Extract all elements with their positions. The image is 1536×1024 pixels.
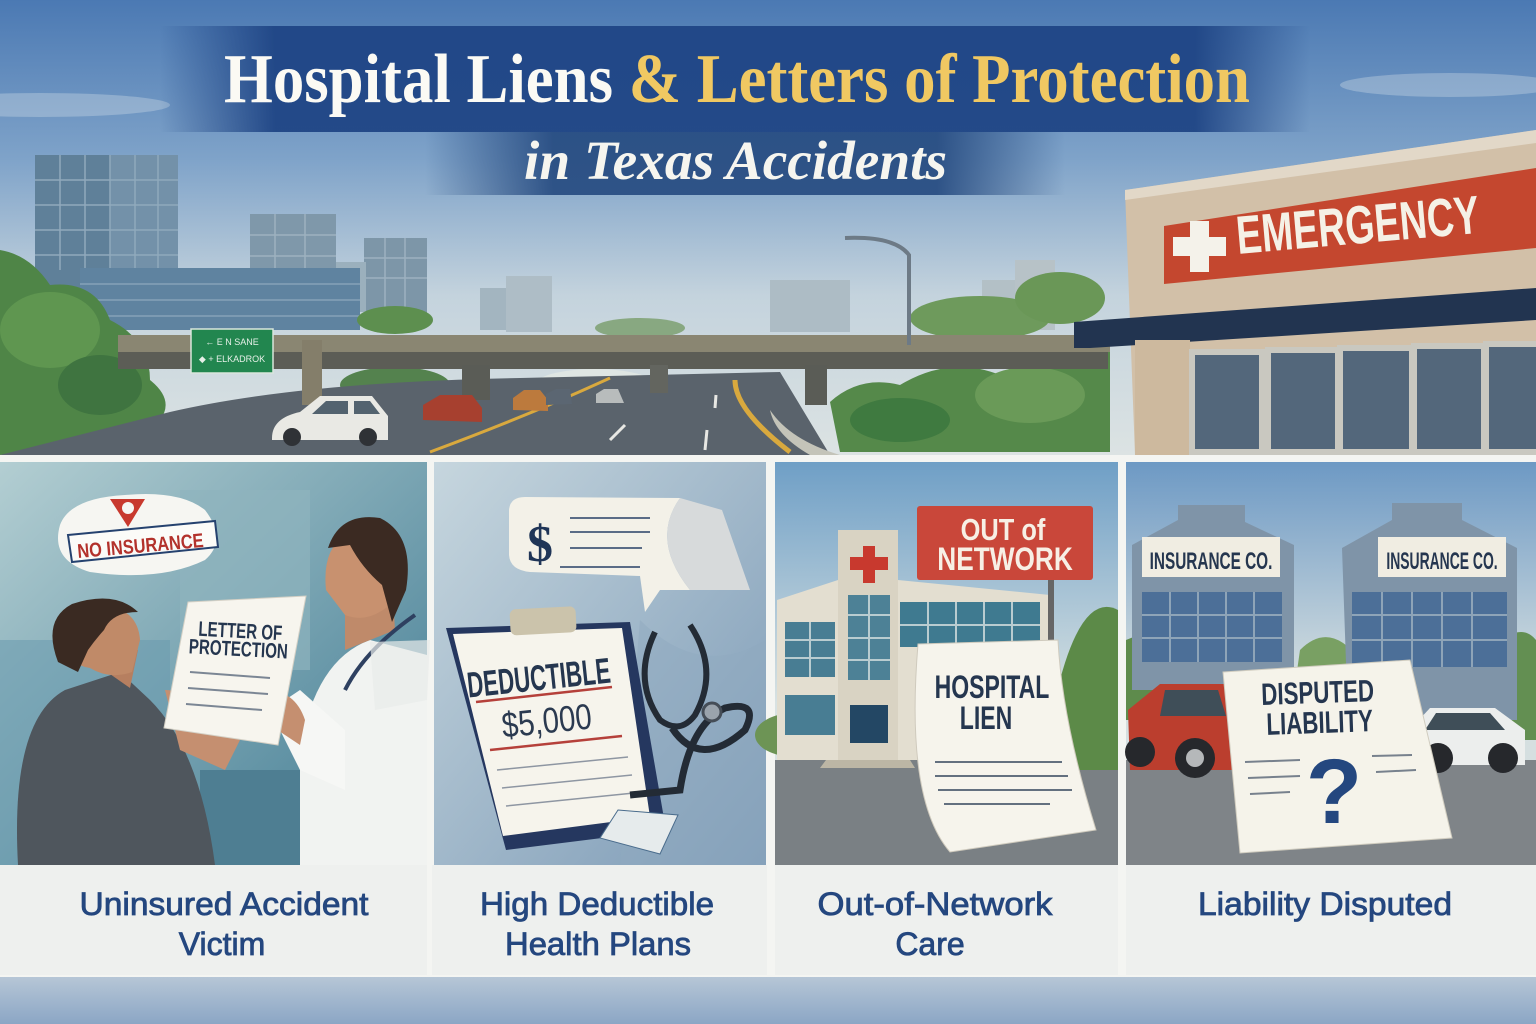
disputed liability document (1223, 660, 1452, 853)
panel: liability disputed (1125, 462, 1536, 865)
out of network sign (917, 506, 1093, 640)
heading: Hospital Liens & Letters of Protection (224, 41, 1250, 118)
hospital building (777, 530, 1050, 768)
hospital lien document (915, 640, 1096, 852)
stethoscope (630, 625, 750, 795)
doctor (265, 517, 430, 865)
caption: out-of-network care: Out-of-Network (818, 886, 1054, 922)
clipboard: DEDUCTIBLE (465, 651, 612, 706)
overpass (118, 335, 1110, 405)
panel: high deductible (434, 462, 766, 865)
panel: out of network (755, 462, 1118, 865)
no insurance badge (58, 494, 218, 575)
insurance building left: INSURANCE CO. (1150, 549, 1272, 575)
letter of protection document (164, 596, 306, 745)
bottom band (0, 977, 1536, 1024)
street lamp (845, 238, 909, 345)
speech bubble bill (509, 497, 750, 612)
highway sign (191, 329, 273, 373)
disputed liability document: LIABILITY (1266, 704, 1374, 742)
emergency sign (1164, 168, 1536, 284)
highway sign: ← E N SANE (205, 337, 259, 347)
hero scene: highway and hospital (0, 0, 1536, 455)
cars (272, 389, 624, 446)
caption strip (0, 865, 1536, 975)
hospital building (1074, 130, 1536, 455)
letter of protection document: LETTER OF (198, 616, 283, 645)
caption: high deductible health plans: High Deductible (480, 886, 714, 922)
clipboard: $5,000 (500, 696, 594, 745)
haze under overpass (535, 369, 655, 401)
disputed liability document: ? (1306, 741, 1362, 843)
out of network sign: NETWORK (937, 543, 1073, 578)
disputed liability document: DISPUTED (1261, 674, 1375, 712)
caption: liability disputed: Liability Disputed (1198, 886, 1452, 922)
red car (1125, 684, 1240, 778)
skyline: left buildings (35, 155, 1055, 332)
tag (600, 810, 678, 854)
caption: out-of-network care: Care (895, 926, 965, 962)
subheading: in Texas Accidents (524, 130, 947, 191)
letter of protection document: PROTECTION (188, 634, 288, 663)
hospital lien document: HOSPITAL (935, 669, 1049, 705)
trees (0, 250, 1110, 455)
out of network sign: OUT of (961, 513, 1046, 548)
insurance building left (1132, 505, 1294, 690)
title banner (160, 26, 1310, 195)
caption: uninsured accident victim: Victim (179, 926, 265, 962)
highway sign: ◆ + ELKADROK (199, 354, 265, 364)
white car (1405, 708, 1525, 773)
man in grey shirt (17, 599, 240, 865)
emergency sign: EMERGENCY (1234, 184, 1482, 266)
hospital lien document: LIEN (960, 700, 1012, 736)
road (0, 372, 830, 455)
clipboard (446, 606, 666, 850)
speech bubble bill: $ (527, 516, 553, 573)
insurance building right: INSURANCE CO. (1386, 548, 1498, 575)
caption: uninsured accident victim: Uninsured Accident (80, 886, 369, 922)
panel: uninsured accident victim (0, 462, 430, 865)
caption: high deductible health plans: Health Plans (505, 926, 691, 962)
insurance building right (1342, 503, 1517, 720)
no insurance badge: NO INSURANCE (76, 528, 204, 562)
